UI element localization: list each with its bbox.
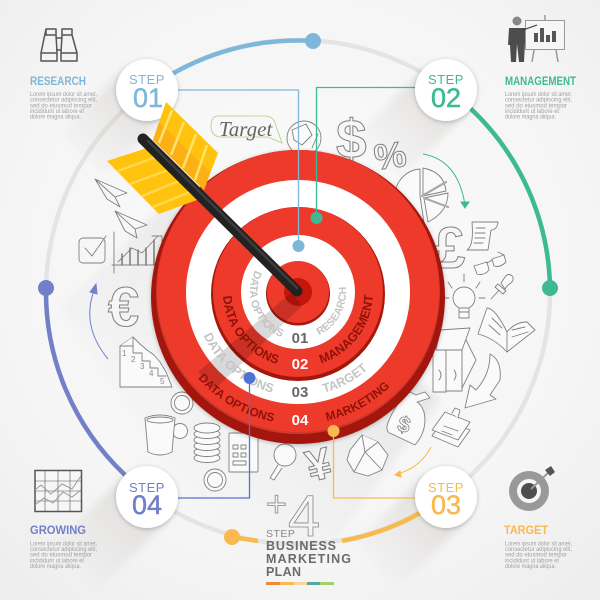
doodle: money bag: $: [395, 411, 413, 438]
plus four glyphs: +: [266, 483, 287, 524]
doodle: curved arrow: [465, 354, 500, 408]
bullseye: [266, 262, 330, 326]
arc: target yellow: [342, 513, 420, 541]
ring numbers: 02: [292, 356, 308, 373]
green curved arrow: [423, 154, 469, 208]
doodle: steps: 1: [122, 349, 127, 358]
title: business marketing plan: STEP: [266, 528, 295, 540]
step 03: STEP: [428, 480, 464, 495]
text: research body: Lorem ipsum dolor sit amet,: [30, 92, 97, 98]
step 01: STEP: [129, 72, 165, 87]
text: research body: dolore magna aliqua.: [30, 115, 81, 121]
yellow curved arrow: [395, 447, 431, 477]
doodle: glasses: [474, 252, 506, 274]
text: research body: consectetur adipiscing elit,: [30, 98, 97, 104]
arc: research blue: [172, 41, 313, 74]
ring text 01: [250, 270, 346, 336]
text: target body: consectetur adipiscing elit,: [505, 547, 572, 553]
arc stub yellow: [232, 537, 258, 541]
ring text 03: TARGET: [322, 362, 366, 392]
doodle: steps: 2: [131, 355, 136, 364]
title: business marketing plan: 4: [288, 484, 320, 549]
title: business marketing plan: [266, 483, 351, 585]
doodle: coin bottom: [204, 469, 226, 491]
text: target body: sed do eiusmod tempor: [505, 553, 567, 559]
text: target body: Lorem ipsum dolor sit amet,: [505, 541, 572, 547]
ring text 04: DATA OPTIONS: [198, 373, 274, 422]
outer red face: [156, 150, 440, 434]
ring text 03: DATA OPTIONS: [204, 332, 274, 392]
text: management body: consectetur adipiscing elit,: [505, 98, 572, 104]
doodle: pie chart: [395, 168, 448, 223]
text: management body: dolore magna aliqua.: [505, 115, 556, 121]
connector: research: [178, 90, 304, 252]
doodle: globe: [287, 121, 321, 155]
text: management body: sed do eiusmod tempor: [505, 103, 567, 109]
heading: target: TARGET: [504, 525, 548, 537]
text: research body: incididunt ut labore et: [30, 109, 84, 115]
target base: [151, 150, 445, 444]
text: management body: Lorem ipsum dolor sit amet,: [505, 92, 572, 98]
step 04: 04: [132, 490, 162, 520]
doodle: steps: 3: [140, 362, 145, 371]
icon: line chart: [35, 470, 82, 512]
icon: presenter: [508, 15, 564, 62]
text: target body: [505, 541, 572, 570]
doodle: target speech bubble: Target: [219, 117, 273, 141]
step 01: 01: [133, 83, 163, 113]
doodle: paper plane 2: [115, 211, 147, 238]
white ring: [186, 180, 410, 404]
ring numbers: [292, 330, 309, 429]
target board: [149, 148, 448, 448]
ring text 02: [223, 294, 373, 364]
track dots: [38, 33, 558, 545]
arrow shadow band: [198, 292, 302, 390]
doodle: target speech bubble: [211, 116, 282, 143]
ring numbers: 03: [292, 384, 308, 401]
connector: management: [310, 88, 415, 224]
doodle: coin stack: [194, 423, 220, 462]
ring numbers: 01: [292, 330, 308, 347]
ring text 01: RESEARCH: [316, 287, 346, 335]
colour bar: [266, 582, 334, 585]
heading: growing: GROWING: [30, 525, 86, 537]
doodle: books: [433, 328, 476, 392]
ring 2 red: [211, 207, 385, 381]
doodle: notes: [432, 408, 470, 447]
doodles: [79, 108, 535, 492]
text: target body: dolore magna aliqua.: [505, 564, 556, 570]
ring numbers: 04: [292, 412, 309, 429]
ring track: [46, 40, 550, 544]
text: research body: sed do eiusmod tempor: [30, 103, 92, 109]
doodle: calculator: [229, 433, 258, 472]
text: growing body: consectetur adipiscing elit,: [30, 547, 97, 553]
heading: research: RESEARCH: [30, 76, 86, 88]
step 02: STEP: [428, 72, 464, 87]
title: business marketing plan: PLAN: [266, 565, 301, 579]
text: growing body: Lorem ipsum dolor sit amet,: [30, 541, 97, 547]
step 04: STEP: [129, 480, 165, 495]
doodle: magnifier: [270, 444, 296, 480]
title: business marketing plan: MARKETING: [266, 552, 351, 566]
doodle: pin: [491, 274, 513, 299]
icon: target: [509, 466, 555, 511]
doodle: scroll: [467, 222, 498, 250]
doodle: yen: ¥: [301, 438, 337, 492]
text: growing body: sed do eiusmod tempor: [30, 553, 92, 559]
step 01: [116, 59, 178, 121]
step long shadows: [55, 68, 468, 589]
doodle: steps: 5: [160, 377, 165, 386]
arrow: [107, 102, 297, 291]
doodle: cup: [145, 415, 188, 455]
doodle: check box: [79, 236, 106, 263]
doodle: crumpled paper: [347, 435, 388, 476]
text: management body: incididunt ut labore et: [505, 109, 559, 115]
ring text 04: [198, 373, 389, 422]
step 03: [415, 466, 477, 528]
doodle: pound: £: [433, 216, 465, 281]
arrow upper feather: [153, 102, 218, 190]
title: business marketing plan: BUSINESS: [266, 539, 336, 553]
doodle: paper plane 1: [95, 179, 127, 207]
arc: growing purple: [46, 288, 125, 475]
ring text 02: MANAGEMENT: [318, 294, 373, 364]
doodle: bar chart up: [112, 232, 163, 273]
ring text 02: DATA OPTIONS: [223, 296, 279, 364]
doodle: coin: [171, 392, 193, 414]
text: growing body: [30, 541, 97, 570]
text: growing body: incididunt ut labore et: [30, 558, 84, 564]
text: growing body: dolore magna aliqua.: [30, 564, 81, 570]
doodle: bulb: [443, 274, 485, 318]
target long shadow: [60, 200, 440, 560]
step 02: 02: [431, 83, 461, 113]
ring text 03: [204, 332, 366, 392]
doodle: steps: [120, 337, 172, 387]
text: management body: [505, 92, 572, 121]
arrow shaft: [143, 139, 297, 291]
step 04: [116, 466, 178, 528]
connector: growing: [178, 372, 256, 498]
step 02: [415, 59, 477, 121]
arrow lower feather: [107, 148, 197, 214]
icon: binoculars: [41, 29, 77, 61]
doodle: percent: %: [371, 133, 409, 178]
text: target body: incididunt ut labore et: [505, 558, 559, 564]
doodle: money bag: [387, 392, 430, 445]
ring text 04: MARKETING: [326, 382, 389, 421]
arc: management green: [470, 108, 550, 288]
heading: management: MANAGEMENT: [505, 76, 576, 88]
connector: target: [328, 425, 415, 498]
ring text 01: DATA OPTIONS: [250, 270, 284, 336]
text: research body: [30, 92, 97, 121]
doodle: steps: 4: [149, 369, 154, 378]
doodle: dollar: $: [336, 108, 367, 170]
step 03: 03: [431, 490, 461, 520]
inner white ring: [241, 235, 355, 349]
doodle: open book: [478, 308, 535, 352]
purple curved arrow: [90, 284, 108, 359]
doodle: euro: €: [108, 275, 139, 338]
